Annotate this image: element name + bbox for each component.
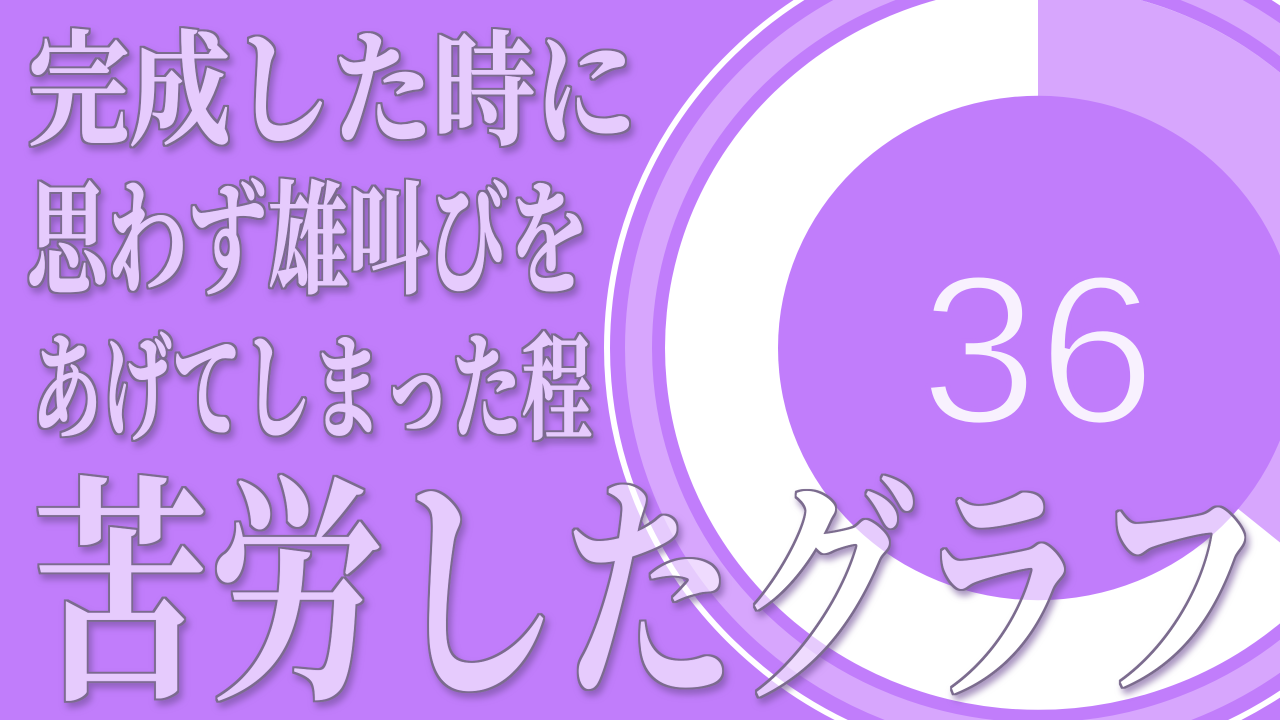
headline line 3: あげてしまった程 [32,327,592,454]
outer thin white ring [607,0,1280,720]
white progress segment [665,0,1280,710]
light purple ring [638,0,1280,720]
donut value: 36 [920,231,1156,468]
light purple segment (36 percent) [1038,0,1280,579]
donut centre [778,96,1280,600]
headline line 2: 思わず雄叫びを [27,175,589,310]
donut chart [607,0,1280,720]
headline line 1: 完成した時に [28,24,636,161]
